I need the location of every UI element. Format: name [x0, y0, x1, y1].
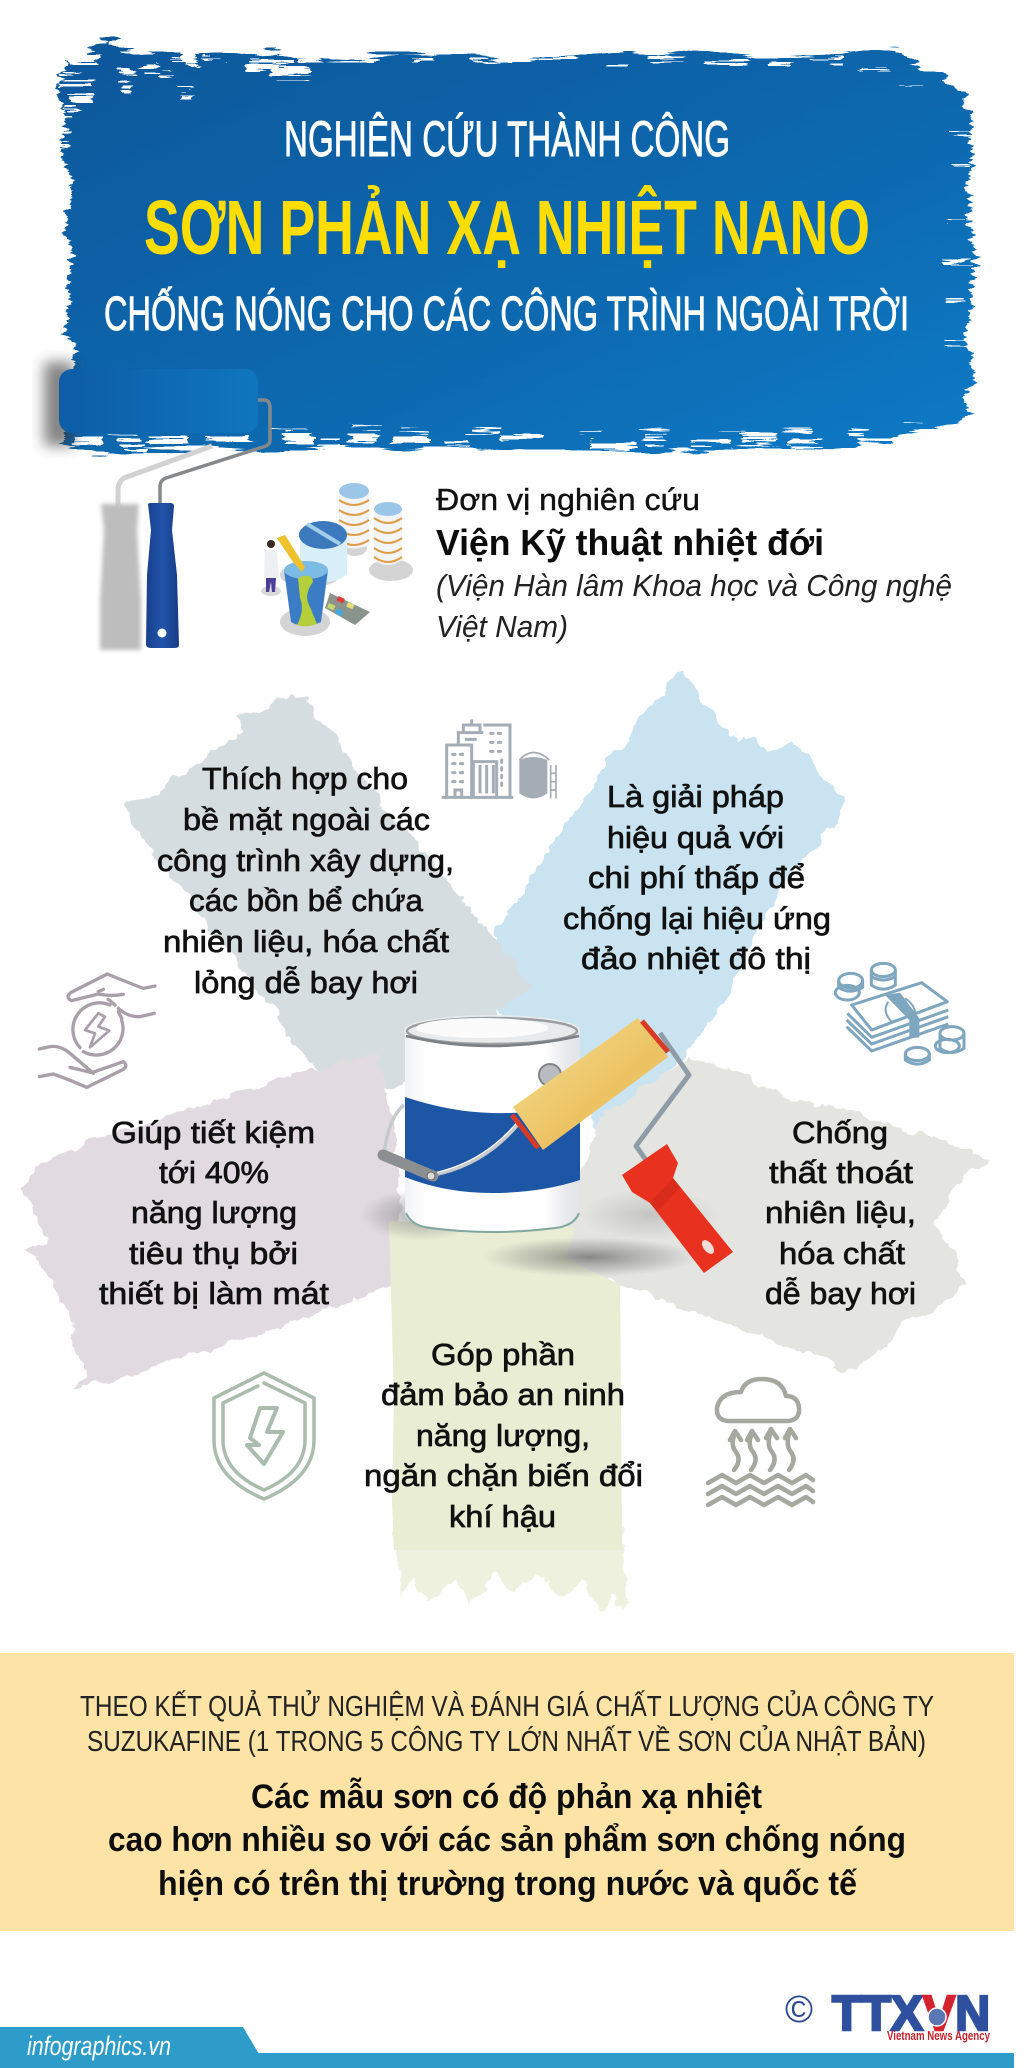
yellow roller sleeve	[513, 1018, 668, 1150]
agency wordmark: TTXVN	[832, 1987, 990, 2041]
icon: cloud with heat and waves	[708, 1379, 813, 1505]
test results panel	[0, 1653, 1014, 1931]
paint stroke: pale green	[389, 1221, 626, 1612]
benefit text: low cost solution: Là giải pháp	[607, 779, 784, 814]
floor shadows	[360, 1189, 720, 1277]
can wire handle	[384, 1105, 520, 1175]
benefit text: energy security: khí hậu	[449, 1499, 556, 1534]
test conclusion: Các mẫu sơn có độ phản xạ nhiệt	[251, 1778, 762, 1816]
benefit text: suitable surfaces: nhiên liệu, hóa chất	[163, 924, 449, 959]
roller sleeve	[59, 369, 258, 433]
header paint banner	[59, 38, 976, 458]
footer tab	[0, 2027, 259, 2054]
benefit text: energy security: năng lượng,	[416, 1418, 590, 1453]
benefit text: energy security: Góp phần	[431, 1337, 575, 1372]
dropper	[277, 535, 305, 572]
benefit text: suitable surfaces: bề mặt ngoài các	[183, 802, 430, 837]
benefit text: loss prevention: thất thoát	[769, 1155, 913, 1190]
benefit text: suitable surfaces	[157, 761, 454, 1000]
title line 1: NGHIÊN CỨU THÀNH CÔNG	[284, 111, 730, 167]
benefit text: energy saving: Giúp tiết kiệm	[111, 1115, 315, 1150]
benefit text: energy saving: năng lượng	[131, 1195, 297, 1230]
benefit text: suitable surfaces: lỏng dễ bay hơi	[194, 965, 418, 1000]
footer site name: infographics.vn	[27, 2031, 171, 2061]
test conclusion: hiện có trên thị trường trong nước và quốc tế	[158, 1865, 857, 1903]
green stroke body	[389, 1221, 622, 1550]
paint stroke: purple	[23, 1053, 400, 1387]
roller caps	[512, 1021, 668, 1148]
paint roller	[44, 362, 270, 650]
paint stroke: grey-blue	[121, 693, 532, 1089]
benefit text: low cost solution: đảo nhiệt đô thị	[581, 941, 811, 976]
benefit text: energy saving: tới 40%	[159, 1155, 269, 1190]
benefit text: low cost solution: chống lại hiệu ứng	[563, 901, 831, 936]
test conclusion: cao hơn nhiều so với các sản phẩm sơn chống nóng	[108, 1821, 906, 1859]
frame shadow	[118, 446, 212, 506]
footer bar	[0, 2027, 1014, 2068]
copyright and agency logo	[785, 1987, 990, 2043]
roller handle	[146, 503, 179, 648]
benefit text: loss prevention	[765, 1115, 916, 1311]
handle shadow	[100, 504, 141, 650]
copyright mark: ©	[785, 1989, 813, 2031]
red handle	[622, 1144, 733, 1273]
benefit text: energy security	[364, 1337, 643, 1534]
agency globe	[928, 2008, 946, 2026]
benefit text: suitable surfaces: Thích hợp cho	[202, 761, 408, 796]
benefit text: loss prevention: Chống	[792, 1115, 888, 1150]
benefit text: loss prevention: nhiên liệu,	[765, 1195, 916, 1230]
agency tagline: Vietnam News Agency	[887, 2029, 990, 2043]
can ear	[539, 1064, 561, 1086]
can body	[405, 1030, 580, 1231]
scientist	[264, 540, 279, 592]
benefit text: low cost solution: hiệu quả với	[607, 820, 784, 855]
benefit text: energy saving: tiêu thụ bởi	[129, 1236, 298, 1271]
benefit text: low cost solution: chi phí thấp để	[588, 860, 805, 895]
roller frame	[160, 400, 270, 506]
paint can and roller	[383, 1015, 733, 1273]
unit parent organisation: (Viện Hàn lâm Khoa học và Công nghệ	[436, 568, 952, 603]
can lid	[404, 1015, 580, 1045]
icon: shield with lightning	[214, 1373, 314, 1499]
storage tanks	[339, 483, 402, 565]
roller shadow	[44, 362, 74, 446]
icon: city buildings and fuel tank	[442, 719, 556, 798]
benefit text: low cost solution	[563, 779, 831, 976]
mixing tank	[299, 521, 347, 582]
benefit text: suitable surfaces: công trình xây dựng,	[157, 843, 454, 878]
green stroke fringe	[394, 1530, 626, 1612]
benefit text: suitable surfaces: các bồn bể chứa	[189, 883, 424, 918]
ground shadows	[280, 563, 340, 587]
benefit text: energy saving: thiết bị làm mát	[99, 1276, 329, 1311]
unit name: Viện Kỹ thuật nhiệt đới	[436, 522, 824, 563]
icon: paint laboratory	[261, 483, 413, 636]
colour swatches	[325, 593, 370, 625]
icon: hands protecting energy	[39, 974, 155, 1087]
unit parent organisation second line: Việt Nam)	[436, 609, 568, 644]
icon: money stack and coins	[835, 963, 964, 1064]
can handle grip	[383, 1155, 433, 1176]
beaker	[284, 561, 328, 626]
panel background	[0, 1653, 1014, 1931]
research unit text	[436, 482, 952, 644]
white dry-brush streaks	[60, 44, 970, 446]
benefit text: energy security: đảm bảo an ninh	[381, 1377, 625, 1412]
can base rim	[406, 1213, 579, 1232]
banner title	[104, 111, 909, 341]
paint stroke: warm grey	[557, 1060, 993, 1371]
can blue band	[405, 1097, 580, 1193]
paint stroke: blue	[496, 669, 846, 1129]
benefit text: loss prevention: dễ bay hơi	[765, 1276, 916, 1311]
test conclusion	[108, 1778, 906, 1903]
benefit text: energy security: ngăn chặn biến đổi	[364, 1458, 643, 1493]
benefit text: loss prevention: hóa chất	[779, 1236, 905, 1271]
unit label: Đơn vị nghiên cứu	[436, 482, 700, 517]
benefit text: energy saving	[99, 1115, 329, 1311]
yellow roller frame	[636, 1033, 689, 1160]
